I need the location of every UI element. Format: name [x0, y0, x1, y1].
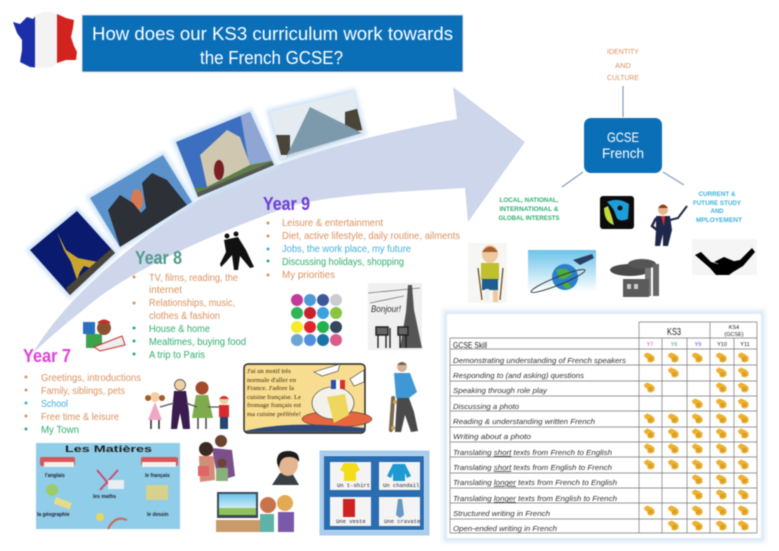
topic label: current and future study and employment: AND — [710, 208, 724, 215]
topic label: local, national, international and global interests: INTERNATIONAL & — [500, 206, 559, 213]
topic label: current and future study and employment: MPLOYEMENT — [696, 217, 742, 224]
year 8 block: clothes & fashion — [149, 311, 220, 322]
year 8 block: internet — [149, 285, 182, 296]
panel: GCSE skill table: Responding to (and asking) questions — [453, 371, 584, 380]
topic label: identity and culture: CULTURE — [607, 73, 639, 82]
year 9 block — [263, 194, 460, 281]
year 8 block: Mealtimes, buying food — [149, 337, 246, 348]
GCSE French hub box: French — [602, 145, 644, 161]
comic panel: French cheese: J'ai un motif très — [247, 368, 291, 375]
image: clothes flashcards: Une cravate — [384, 518, 420, 525]
comic panel: French cheese: normale d'aller en — [247, 377, 297, 384]
icon: social media grid — [291, 294, 342, 346]
title banner: the French GCSE? — [200, 47, 343, 68]
year 7 block: Year 7 — [23, 346, 71, 366]
icon: businessman pointing — [652, 204, 687, 246]
photo: Louvre pyramid — [265, 88, 365, 163]
photo: Arc de Triomphe — [170, 105, 280, 200]
panel: GCSE skill table: Y10 — [717, 342, 727, 348]
comic panel: French cheese: fromage français est — [247, 402, 301, 409]
topic label: local, national, international and global interests: LOCAL, NATIONAL, — [500, 197, 559, 204]
image: child reading — [83, 320, 125, 351]
year 7 block: My Town — [41, 425, 79, 436]
panel: GCSE skill table: KS3 — [667, 327, 681, 338]
panel: GCSE skill table: Translating longer texts from French to English — [453, 478, 617, 487]
poster: Les Matières: le français — [145, 473, 170, 479]
year 8 block: A trip to Paris — [149, 350, 205, 361]
topic label: current and future study and employment — [693, 191, 742, 224]
panel: GCSE skill table: Reading & understanding written French — [453, 417, 595, 426]
GCSE French hub box: GCSE — [607, 129, 639, 145]
curved progress arrow — [33, 87, 525, 353]
image: clothes flashcards: Un chandail — [383, 482, 419, 489]
year 7 block — [23, 346, 141, 436]
panel: GCSE skill table: Writing about a photo — [453, 432, 531, 441]
year 9 block: Discussing holidays, shopping — [282, 257, 404, 268]
poster: Les Matières: la géographie — [37, 512, 70, 518]
title banner — [83, 16, 462, 71]
icon: France flag map — [12, 12, 78, 68]
year 7 block: Free time & leisure — [41, 412, 119, 423]
panel: GCSE skill table: KS4 — [729, 325, 739, 331]
topic label: local, national, international and global interests: GLOBAL INTERESTS — [498, 215, 560, 222]
year 9 block: Year 9 — [263, 194, 310, 214]
icon: Fairtrade logo — [600, 196, 634, 229]
panel: GCSE skill table: Speaking through role play — [453, 386, 548, 395]
year 7 block: Greetings, introductions — [41, 373, 141, 384]
image: factory with smoke — [610, 259, 659, 297]
topic label: local, national, international and global interests — [498, 197, 560, 222]
comic panel: French cheese: ma cuisine préférée! — [247, 411, 301, 418]
panel: GCSE skill table: Translating short texts from English to French — [453, 463, 612, 472]
image: young man's face — [272, 451, 299, 485]
image: cartoon family — [145, 380, 229, 429]
icon: graduate silhouette — [692, 239, 757, 275]
image: clothes flashcards: Un t-shirt — [337, 482, 370, 489]
photo: Eiffel Tower at night — [25, 205, 120, 300]
image: teen with skateboard — [389, 362, 418, 432]
panel: GCSE skill table: GCSE Skill — [453, 341, 487, 350]
panel: GCSE skill table: Y11 — [740, 342, 750, 348]
GCSE French hub box — [584, 118, 662, 173]
comic panel: French cheese — [244, 364, 372, 433]
poster: Les Matières: le dessin — [147, 512, 168, 518]
panel: GCSE skill table: Discussing a photo — [453, 402, 519, 411]
table grid lines — [450, 322, 757, 533]
topic label: identity and culture: IDENTITY — [607, 47, 639, 56]
image: children watching TV — [216, 492, 294, 532]
year 8 block: House & home — [149, 324, 210, 335]
topic label: identity and culture — [607, 47, 639, 82]
year 8 block — [132, 248, 246, 361]
topic label: current and future study and employment: CURRENT & — [698, 191, 736, 198]
year 8 block: Year 8 — [135, 248, 182, 268]
image: boy on crutches — [468, 243, 507, 303]
image: family portrait — [198, 435, 235, 482]
thumbs-up ticks — [644, 352, 748, 530]
topic label: current and future study and employment: FUTURE STUDY — [693, 200, 742, 207]
year 9 block: Diet, active lifestyle, daily routine, ailments — [282, 231, 460, 242]
poster: Les Matières: l'anglais — [45, 473, 65, 479]
icon: dancers silhouette — [220, 232, 254, 270]
image: clothes flashcards: Une veste — [336, 518, 366, 525]
year 8 block: Relationships, music, — [149, 298, 235, 309]
panel: GCSE skill table: Demonstrating understanding of French speakers — [453, 356, 626, 365]
photo: Notre-Dame fire — [85, 150, 195, 250]
image: globe and aeroplane — [528, 250, 596, 296]
poster: Les Matières: les maths — [93, 494, 116, 500]
panel: GCSE skill table: Translating longer texts from English to French — [453, 494, 617, 503]
image: clothes flashcards — [322, 453, 427, 533]
comic panel: French cheese: France. J'adore la — [247, 385, 294, 392]
panel: GCSE skill table: Y9 — [695, 342, 701, 348]
year 8 block: TV, films, reading, the — [149, 273, 238, 284]
poster: Les Matières: Les Matières — [65, 444, 152, 454]
panel: GCSE skill table: (GCSE) — [724, 332, 744, 338]
poster: Les Matières — [36, 443, 180, 529]
panel: GCSE skill table: Translating short texts from French to English — [453, 448, 612, 457]
year 9 block: Jobs, the work place, my future — [282, 244, 411, 255]
panel: GCSE skill table: Y7 — [647, 342, 653, 348]
topic label: identity and culture: AND — [615, 61, 631, 70]
year 9 block: Leisure & entertainment — [282, 218, 383, 229]
panel: GCSE skill table — [445, 312, 763, 540]
panel: GCSE skill table: Y8 — [671, 342, 677, 348]
image: Bonjour Eiffel sketch: Bonjour! — [371, 304, 401, 314]
image: Bonjour Eiffel sketch — [368, 283, 422, 350]
comic panel: French cheese: cuisine française. Le — [247, 394, 301, 401]
year 7 block: School — [41, 399, 68, 410]
title banner: How does our KS3 curriculum work towards — [92, 23, 453, 44]
year 9 block: My priorities — [282, 270, 335, 281]
year 7 block: Family, siblings, pets — [41, 386, 125, 397]
panel: GCSE skill table: Structured writing in French — [453, 509, 550, 518]
panel: GCSE skill table: Open-ended writing in French — [453, 524, 557, 533]
